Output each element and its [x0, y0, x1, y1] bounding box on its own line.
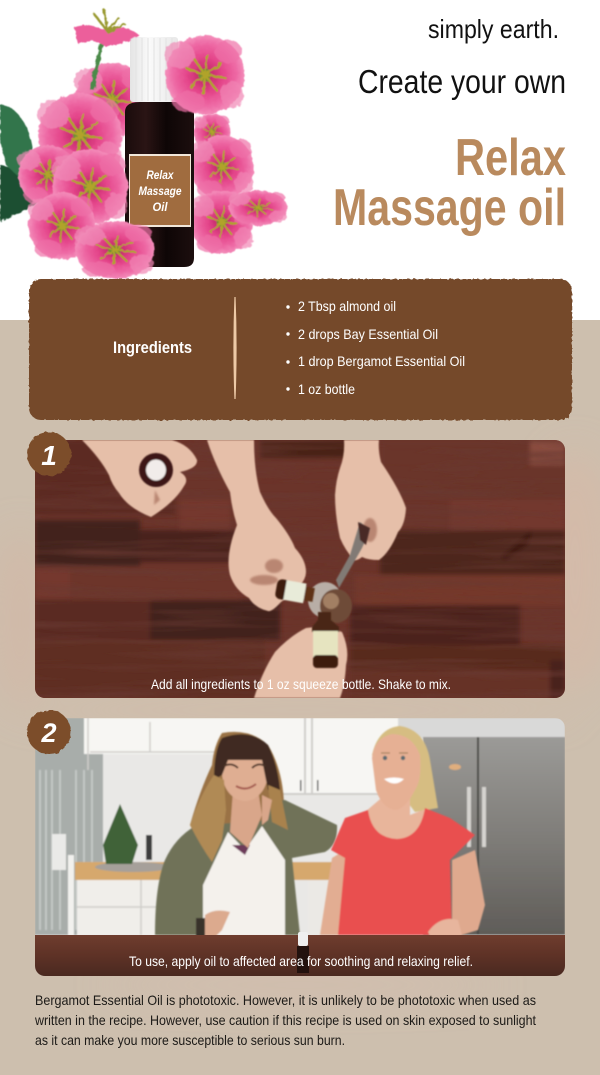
ingredients list: 2 Tbsp almond oil — [298, 298, 396, 314]
woman right — [320, 726, 485, 942]
bottle label: Relax — [146, 168, 175, 182]
bottle label: Massage — [138, 184, 182, 198]
ingredients list: 2 drops Bay Essential Oil — [298, 326, 438, 342]
disclaimer text: as it can make you more susceptible to serious sun burn. — [35, 1032, 345, 1048]
bottle held top left — [139, 453, 173, 487]
heading: create your own: Create your own — [358, 63, 566, 100]
bottle label: Oil — [152, 200, 168, 214]
ingredients list: 1 oz bottle — [298, 381, 355, 397]
disclaimer text — [34, 992, 536, 1048]
logo: simply earth: simply earth. — [428, 14, 559, 44]
ingredients list: 1 drop Bergamot Essential Oil — [298, 353, 465, 369]
flowers behind bottle — [17, 63, 254, 254]
badge: step 1: 1 — [41, 440, 57, 471]
caption: step 2: To use, apply oil to affected area for soothing and relaxing relief. — [129, 953, 473, 969]
ingredients heading: Ingredients — [113, 338, 192, 357]
title: relax massage oil: Relax — [455, 129, 566, 187]
caption: step 1: Add all ingredients to 1 oz squeeze bottle. Shake to mix. — [151, 676, 451, 692]
ingredients list — [286, 298, 465, 397]
hands — [82, 440, 406, 698]
title: relax massage oil — [333, 129, 566, 237]
photo: step 1 hands over wood table — [35, 440, 565, 698]
measuring spoons — [308, 522, 370, 623]
hand shadows — [154, 490, 377, 585]
kitchen background — [35, 718, 565, 976]
badge: step 1 — [27, 432, 71, 476]
disclaimer text: Bergamot Essential Oil is phototoxic. However, it is unlikely to be phototoxic when used as — [35, 992, 536, 1008]
hero photo: bottle and pink flowers — [0, 10, 287, 279]
bottle cap — [130, 37, 178, 102]
badge: step 2: 2 — [40, 718, 57, 748]
green leaves — [0, 88, 92, 222]
woman left — [155, 732, 337, 940]
photo: step 2 two women in kitchen — [35, 718, 565, 976]
bottle label — [129, 154, 191, 227]
bottle body — [125, 102, 194, 267]
essential oil bottles — [274, 579, 339, 668]
flowers in front of bottle — [28, 10, 287, 279]
wood table — [35, 440, 565, 698]
small bottle on table — [297, 932, 309, 973]
disclaimer text: written in the recipe. However, use caution if this recipe is used on skin exposed to sunlight — [34, 1012, 536, 1028]
panel: ingredients — [29, 279, 572, 420]
divider — [234, 297, 236, 399]
wooden table — [35, 935, 565, 976]
badge: step 2 — [27, 710, 71, 754]
